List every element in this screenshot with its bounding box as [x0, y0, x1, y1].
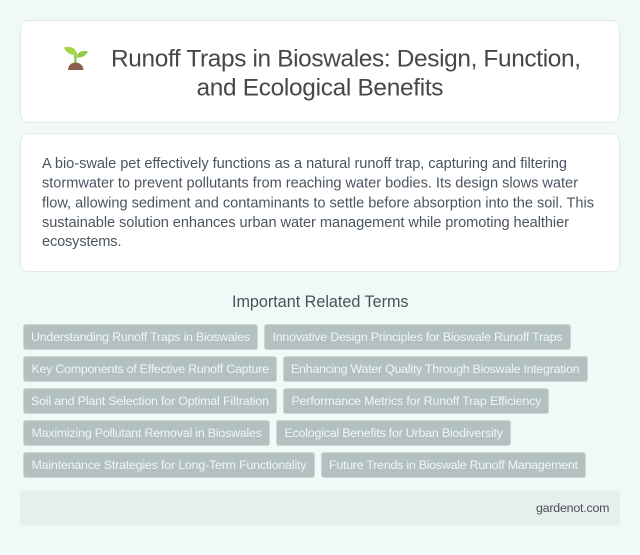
text block: summary paragraph: ecosystems. — [42, 234, 122, 250]
title: and Ecological Benefits — [196, 74, 444, 102]
chip: enhancing water quality — [284, 356, 588, 382]
chip: soil and plant selection — [24, 388, 276, 414]
text block: summary paragraph: A bio-swale pet effectively functions as a natural runoff trap, capturing and filtering — [42, 156, 567, 172]
chip: maximizing pollutant removal — [24, 420, 270, 446]
chip: innovative design principles: Innovative Design Principles for Bioswale Runoff Traps — [272, 330, 562, 344]
chip: performance metrics: Performance Metrics for Runoff Trap Efficiency — [292, 394, 542, 408]
text block: summary paragraph: stormwater to prevent pollutants from reaching water bodies. Its design slows water — [42, 176, 578, 192]
chip: performance metrics — [284, 388, 548, 414]
chip: maximizing pollutant removal: Maximizing Pollutant Removal in Bioswales — [32, 426, 262, 440]
chip: ecological benefits: Ecological Benefits for Urban Biodiversity — [284, 426, 504, 440]
chip: future trends: Future Trends in Bioswale Runoff Management — [329, 458, 579, 472]
chip: ecological benefits — [276, 420, 510, 446]
title: Runoff Traps in Bioswales: Design, Function, — [111, 46, 581, 72]
title — [111, 46, 581, 102]
chip: maintenance strategies — [24, 452, 314, 478]
chip: soil and plant selection: Soil and Plant Selection for Optimal Filtration — [31, 394, 269, 408]
chip: innovative design principles — [264, 324, 570, 350]
panel: title card — [20, 20, 620, 122]
icon: seedling — [64, 47, 88, 70]
text block: summary paragraph — [42, 156, 594, 250]
panel: related term chips — [24, 324, 588, 478]
panel: summary card — [20, 134, 620, 272]
chip: key components: Key Components of Effective Runoff Capture — [32, 362, 269, 376]
chip: future trends — [322, 452, 586, 478]
heading: important related terms: Important Related Terms — [232, 293, 408, 311]
chip: understanding runoff traps: Understanding Runoff Traps in Bioswales — [31, 330, 250, 344]
chip: key components — [24, 356, 276, 382]
chip: understanding runoff traps — [24, 324, 258, 350]
footer source text: gardenot.com — [536, 501, 610, 515]
text block: summary paragraph: sustainable solution enhances urban water management while promoting healthier — [42, 215, 569, 231]
chip: maintenance strategies: Maintenance Strategies for Long-Term Functionality — [32, 458, 307, 472]
footer bar — [20, 491, 620, 525]
chip: enhancing water quality: Enhancing Water Quality Through Bioswale Integration — [291, 362, 580, 376]
text block: summary paragraph: flow, allowing sediment and contaminants to settle before absorption into the soil. This — [42, 196, 594, 212]
